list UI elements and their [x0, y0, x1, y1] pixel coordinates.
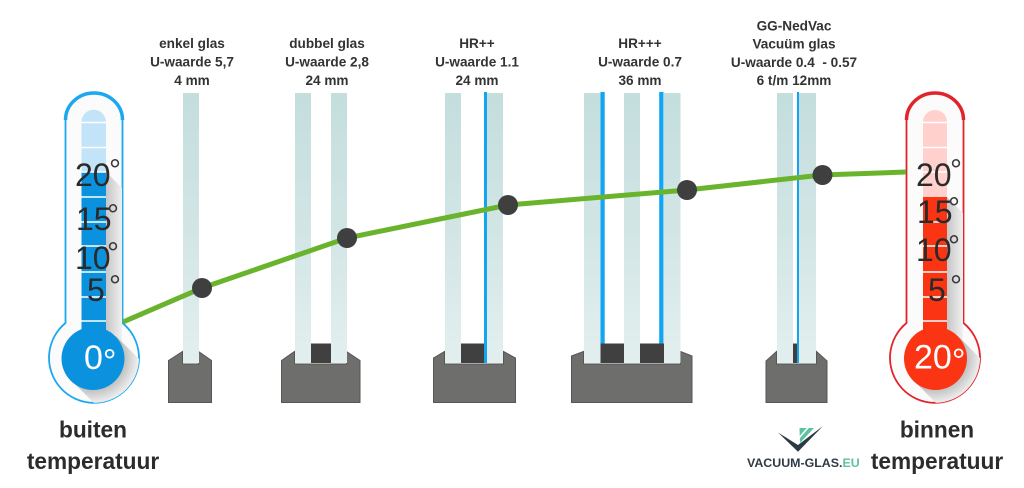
glazing: vacuum glass: [766, 92, 827, 402]
thermometer casing: [49, 93, 139, 403]
spacers: [600, 344, 664, 363]
low-e coatings: [600, 92, 664, 344]
thermometer casing: [890, 93, 980, 403]
bulb value: 0: [84, 339, 103, 377]
label: vacuum glass: 6 t/m 12mm: [757, 73, 831, 88]
scale numbers: °: [107, 199, 119, 232]
label: HR+++: HR+++: [618, 36, 662, 51]
thermometer: inside temperature: [889, 91, 981, 404]
scale numbers: 5: [928, 272, 946, 308]
caption: binnen temperatuur: temperatuur: [871, 448, 1003, 474]
scale numbers: °: [948, 192, 960, 225]
scale numbers: 5: [87, 272, 105, 308]
glass pane: [183, 93, 199, 363]
scale numbers: 10: [75, 240, 111, 276]
thermometer shadow: [76, 172, 139, 403]
scale numbers: [75, 154, 121, 308]
bulb value: 20: [914, 338, 952, 376]
logo mark: [778, 426, 823, 452]
glass panes: [445, 93, 503, 363]
light column: [82, 110, 106, 172]
scale numbers: °: [948, 230, 960, 263]
light column: [923, 110, 947, 197]
low-e coating: [797, 92, 799, 363]
glazing: enkel glas: [168, 93, 212, 402]
caption: binnen temperatuur: binnen: [900, 416, 974, 442]
label: vacuum glass: U-waarde 0.4 - 0.57: [731, 55, 857, 70]
scale numbers: 20: [916, 157, 952, 193]
low-e coating: [484, 92, 487, 363]
scale numbers: 15: [917, 194, 953, 230]
data points: [192, 165, 832, 298]
scale numbers: [916, 154, 962, 308]
frame: [282, 352, 360, 402]
bulb value: °: [103, 343, 117, 381]
thermometer shadow: [916, 197, 980, 403]
caption: buiten temperatuur: temperatuur: [27, 448, 159, 474]
scale numbers: 10: [916, 232, 952, 268]
spacer: [793, 344, 797, 363]
label: dubbel glas: 24 mm: [305, 73, 349, 88]
label: enkel glas: U-waarde 5,7: [150, 54, 234, 70]
scale numbers: °: [109, 270, 121, 303]
spacer: [311, 344, 331, 363]
label: HR+++: 36 mm: [618, 73, 662, 88]
caption: buiten temperatuur: buiten: [59, 416, 127, 442]
temperature curve: [123, 165, 906, 322]
scale numbers: °: [950, 154, 962, 187]
glazing: HR+++: [572, 92, 692, 402]
logo wordmark: VACUUM-GLAS.EU: [747, 456, 860, 470]
bulb value: °: [952, 342, 965, 380]
label: dubbel glas: U-waarde 2,8: [285, 54, 369, 70]
scale numbers: 20: [75, 157, 111, 193]
label: HR++: 24 mm: [455, 73, 499, 88]
spacer: [461, 344, 484, 363]
glazing: HR++: [434, 92, 516, 402]
frame: [766, 352, 827, 402]
scale numbers: 15: [76, 201, 112, 237]
frame: [168, 352, 212, 402]
thermometer: outside temperature: [48, 91, 140, 404]
label: enkel glas: enkel glas: [159, 36, 225, 51]
scale numbers: °: [950, 270, 962, 303]
scale numbers: °: [107, 237, 119, 270]
glass panes: [295, 93, 347, 363]
label: vacuum glass: Vacuüm glas: [752, 36, 836, 52]
label: enkel glas: 4 mm: [174, 73, 210, 88]
frame: [572, 352, 692, 402]
glass panes: [777, 93, 816, 363]
label: HR+++: U-waarde 0.7: [598, 54, 682, 70]
logo: vacuum-glas.eu: [747, 426, 860, 470]
frame: [434, 352, 516, 402]
scale numbers: °: [109, 154, 121, 187]
blue column and bulb: [62, 172, 124, 390]
label: dubbel glas: dubbel glas: [289, 36, 365, 51]
label: vacuum glass: GG-NedVac: [757, 18, 832, 34]
label: HR++: U-waarde 1.1: [435, 54, 519, 70]
glass panes: [584, 93, 680, 363]
red column and bulb: [904, 197, 967, 390]
label: HR++: HR++: [459, 36, 495, 51]
glazing: dubbel glas: [282, 93, 360, 402]
